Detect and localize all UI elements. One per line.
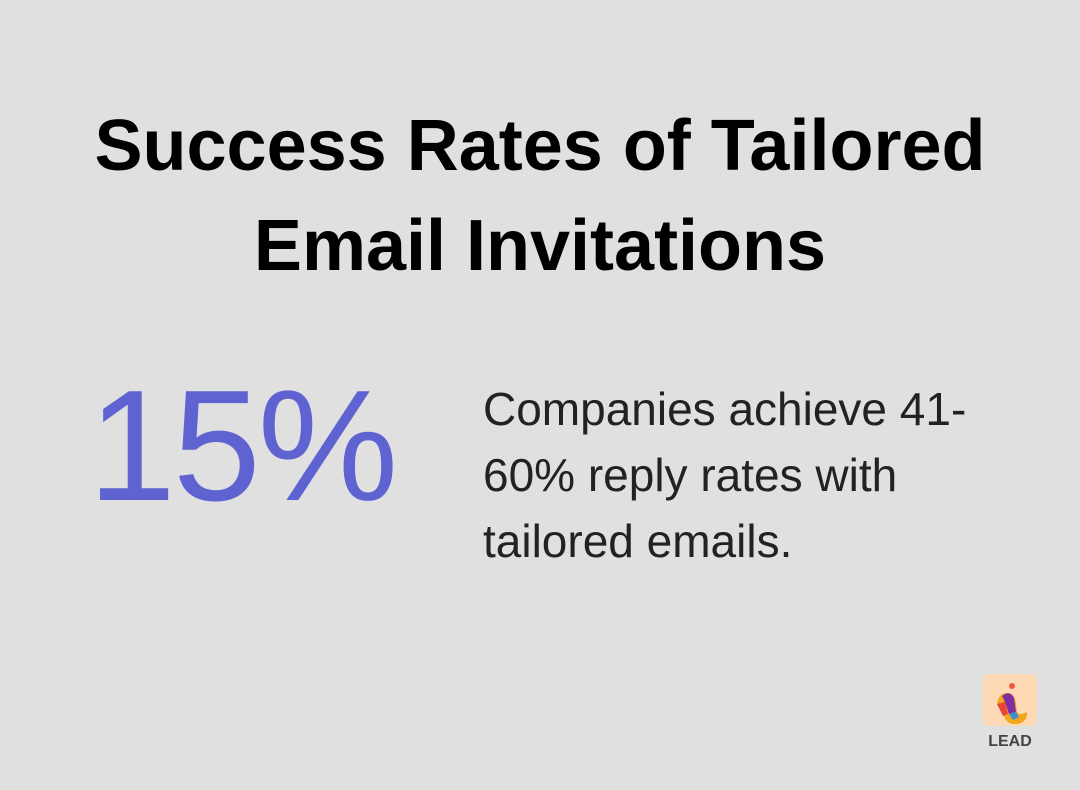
title: Success Rates of Tailored — [94, 106, 986, 186]
description: tailored emails. — [483, 515, 792, 567]
description — [483, 383, 966, 567]
description: Companies achieve 41- — [483, 383, 966, 435]
big stat: 15% — [88, 358, 395, 534]
description: 60% reply rates with — [483, 449, 897, 501]
logo: LEAD — [988, 733, 1032, 750]
title: Email Invitations — [254, 206, 826, 286]
title — [94, 106, 986, 286]
logo — [983, 674, 1037, 750]
